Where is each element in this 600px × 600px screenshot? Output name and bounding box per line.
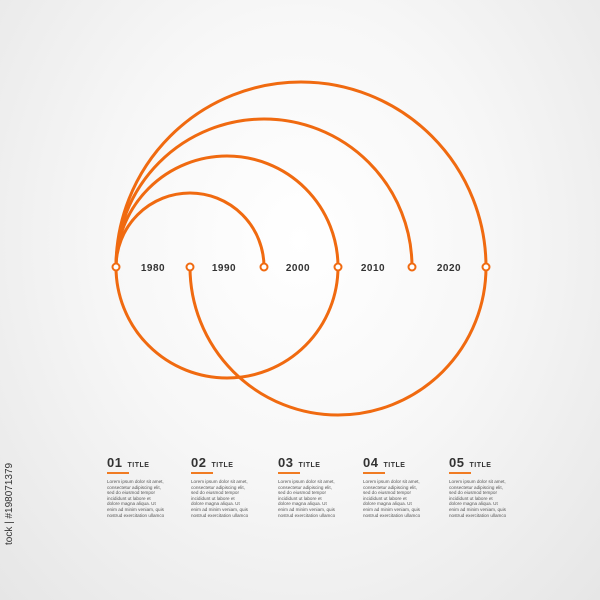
column 01 <box>107 455 164 518</box>
column 05: 05 TITLE <box>449 455 491 470</box>
column 02: Lorem ipsum dolor sit amet, <box>191 479 248 484</box>
column 01: consectetur adipiscing elit, <box>107 485 161 490</box>
column 04: Lorem ipsum dolor sit amet, <box>363 479 420 484</box>
column 03: dolore magna aliqua. Ut <box>278 501 327 506</box>
year labels: 2000 <box>286 263 310 274</box>
column 01: 01 TITLE <box>107 455 149 470</box>
column 05: Lorem ipsum dolor sit amet, <box>449 479 506 484</box>
column 01: incididunt ut labore et <box>107 496 151 501</box>
column 01: sed do eiusmod tempor <box>107 490 155 495</box>
column 04: dolore magna aliqua. Ut <box>363 501 412 506</box>
column 05 <box>449 455 506 518</box>
column 01: enim ad minim veniam, quis <box>107 507 164 512</box>
column 05: incididunt ut labore et <box>449 496 493 501</box>
column 02: 02 TITLE <box>191 455 233 470</box>
column 03: incididunt ut labore et <box>278 496 322 501</box>
year labels: 1980 <box>141 263 165 274</box>
column 01: nostrud exercitation ullamco <box>107 513 164 518</box>
column 02: enim ad minim veniam, quis <box>191 507 248 512</box>
column 04: consectetur adipiscing elit, <box>363 485 417 490</box>
column 04 <box>363 455 420 518</box>
year labels: 2020 <box>437 263 461 274</box>
column 03: 03 TITLE <box>278 455 320 470</box>
upper arcs <box>116 82 486 267</box>
column 05: consectetur adipiscing elit, <box>449 485 503 490</box>
column 05: enim ad minim veniam, quis <box>449 507 506 512</box>
side stock id: tock | #198071379 <box>4 463 15 545</box>
column 04: nostrud exercitation ullamco <box>363 513 420 518</box>
column 01: dolore magna aliqua. Ut <box>107 501 156 506</box>
column 02 <box>191 455 248 518</box>
column 05: nostrud exercitation ullamco <box>449 513 506 518</box>
column 02: sed do eiusmod tempor <box>191 490 239 495</box>
lower arcs <box>116 267 486 415</box>
timeline points <box>112 264 490 270</box>
column 03: enim ad minim veniam, quis <box>278 507 335 512</box>
column 05: sed do eiusmod tempor <box>449 490 497 495</box>
year labels: 1990 <box>212 263 236 274</box>
column 04: enim ad minim veniam, quis <box>363 507 420 512</box>
year labels: 2010 <box>361 263 385 274</box>
column 01: Lorem ipsum dolor sit amet, <box>107 479 164 484</box>
column 02: consectetur adipiscing elit, <box>191 485 245 490</box>
column 04: incididunt ut labore et <box>363 496 407 501</box>
column 03: consectetur adipiscing elit, <box>278 485 332 490</box>
year labels <box>141 263 461 274</box>
column 02: incididunt ut labore et <box>191 496 235 501</box>
column 03: nostrud exercitation ullamco <box>278 513 335 518</box>
column 02: dolore magna aliqua. Ut <box>191 501 240 506</box>
column 03: sed do eiusmod tempor <box>278 490 326 495</box>
column 04: sed do eiusmod tempor <box>363 490 411 495</box>
column 03 <box>278 455 335 518</box>
column 03: Lorem ipsum dolor sit amet, <box>278 479 335 484</box>
column 05: dolore magna aliqua. Ut <box>449 501 498 506</box>
column 02: nostrud exercitation ullamco <box>191 513 248 518</box>
column 04: 04 TITLE <box>363 455 405 470</box>
